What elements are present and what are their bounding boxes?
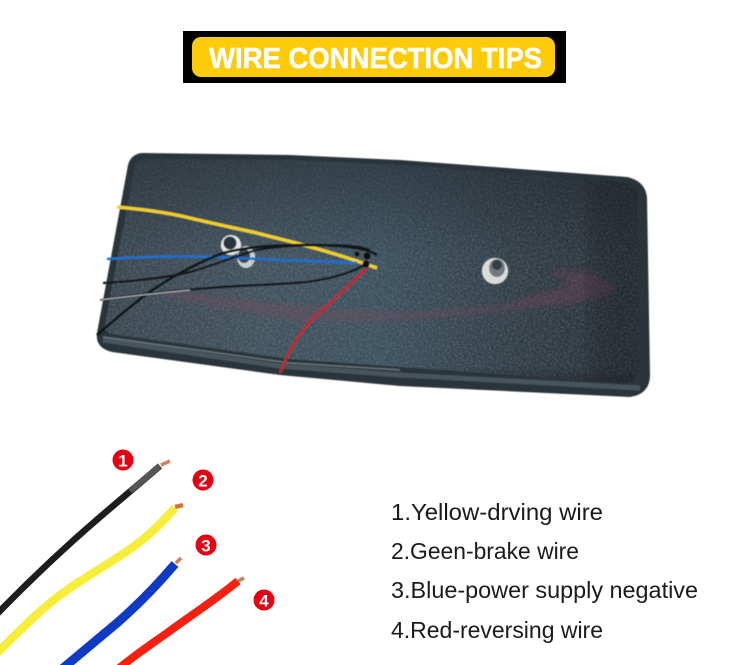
wire samples xyxy=(0,450,274,665)
photo: rear of tail lamp with wires xyxy=(95,150,650,397)
wire grommets xyxy=(354,252,370,268)
badge 4 xyxy=(254,590,274,610)
faint red reflection xyxy=(160,270,618,322)
left bolt xyxy=(221,235,255,268)
title text: WIRE CONNECTION TIPS xyxy=(209,43,542,75)
right bolt xyxy=(482,258,508,284)
title banner xyxy=(183,31,566,83)
blue wire xyxy=(107,256,357,263)
badge 3 xyxy=(196,534,216,556)
legend item 2: 2.Geen-brake wire xyxy=(391,538,579,564)
badge 4: 4 xyxy=(259,592,269,610)
badge 1 xyxy=(112,450,134,470)
yellow wire sample xyxy=(0,505,183,654)
lamp back face xyxy=(104,159,638,383)
yellow wire xyxy=(117,207,377,268)
badge 2: 2 xyxy=(198,472,208,490)
lamp lower rim band xyxy=(103,340,640,388)
legend item 3: 3.Blue-power supply negative xyxy=(391,577,698,603)
badge 2 xyxy=(192,470,214,490)
red wire sample xyxy=(118,578,244,665)
badge 3: 3 xyxy=(201,536,211,556)
black wire 2 xyxy=(103,245,370,283)
legend item 4: 4.Red-reversing wire xyxy=(391,617,603,643)
black wire sample xyxy=(0,461,170,614)
legend item 1: 1.Yellow-drving wire xyxy=(391,499,603,525)
black wire 1 xyxy=(97,245,377,335)
grey wire xyxy=(100,263,367,300)
lamp rim highlight xyxy=(103,337,400,370)
red wire xyxy=(280,268,367,373)
badge 1: 1 xyxy=(118,452,128,470)
wire legend xyxy=(391,499,698,643)
blue wire sample xyxy=(62,558,181,665)
lamp housing rim xyxy=(97,153,650,397)
